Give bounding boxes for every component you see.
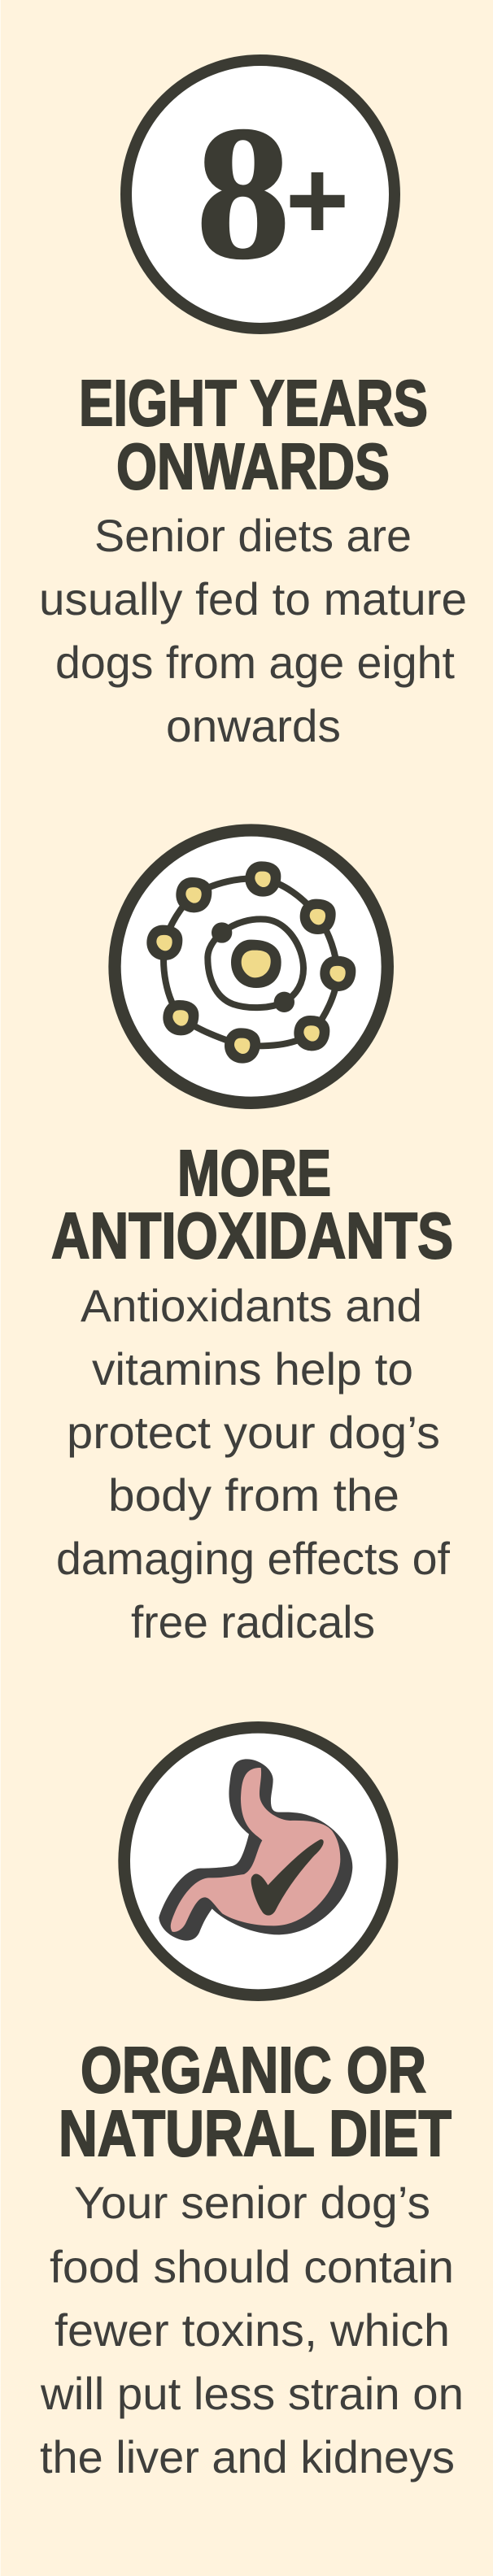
text: antioxidants description: free radicals — [131, 1596, 375, 1647]
text: antioxidants description: vitamins help to — [92, 1343, 413, 1395]
heading: more antioxidants: MORE — [177, 1137, 331, 1209]
text: organic diet description: fewer toxins, which — [55, 2304, 450, 2356]
icon: stomach with check mark — [124, 1727, 392, 1995]
text: antioxidants description: Antioxidants and — [81, 1280, 422, 1331]
text: organic diet description: will put less strain on — [40, 2368, 464, 2419]
heading: more antioxidants — [51, 1137, 453, 1272]
text: organic diet description — [40, 2177, 464, 2482]
section: more antioxidants — [51, 830, 453, 1647]
text: senior diets description: onwards — [166, 700, 341, 751]
text: organic diet description: food should contain — [50, 2241, 454, 2292]
section: organic or natural diet — [40, 1727, 464, 2482]
heading: eight years onwards: ONWARDS — [116, 430, 390, 503]
heading: organic or natural diet — [59, 2034, 452, 2169]
text: antioxidants description: body from the — [108, 1469, 399, 1521]
text: senior diets description: dogs from age eight — [55, 637, 455, 688]
section: eight years onwards — [39, 60, 467, 751]
icon: atom with free radicals — [115, 830, 387, 1103]
text: senior diets description — [39, 510, 467, 751]
text: antioxidants description: damaging effects of — [56, 1533, 450, 1584]
text: senior diets description: usually fed to mature — [39, 573, 467, 624]
text: antioxidants description — [56, 1280, 450, 1647]
text: senior diets description: Senior diets are — [94, 510, 412, 561]
icon: 8+ badge: 8 — [196, 87, 290, 298]
icon: 8+ badge — [126, 60, 395, 329]
icon: check mark — [251, 1839, 324, 1916]
text: organic diet description: Your senior dog’s — [74, 2177, 430, 2228]
heading: eight years onwards — [79, 367, 428, 503]
text: antioxidants description: protect your dog’s — [67, 1407, 440, 1458]
heading: organic or natural diet: ORGANIC OR — [81, 2034, 426, 2106]
text: organic diet description: the liver and kidneys — [40, 2431, 455, 2482]
icon: 8+ badge: + — [286, 136, 349, 263]
